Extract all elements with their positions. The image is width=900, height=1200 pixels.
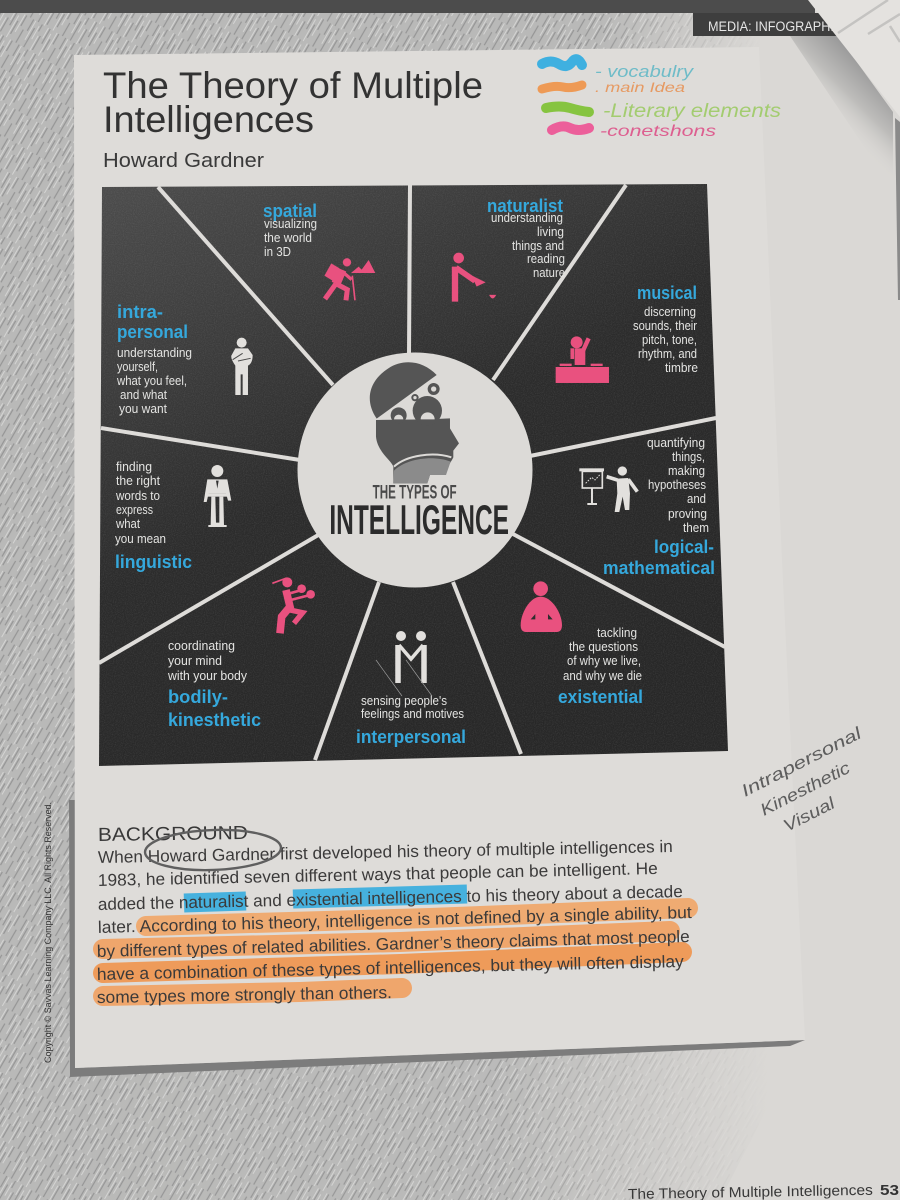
segment: musical: timbre [665, 360, 698, 375]
segment: spatial: spatial [263, 200, 317, 221]
section tab: media infographic [693, 13, 843, 36]
segment: musical [556, 282, 698, 383]
text block: background paragraph: by different types of related abilities. Gardner’s theory claims that most people [97, 927, 690, 961]
background: textured top band [0, 12, 762, 56]
segment: logical-mathematical: things, [672, 449, 705, 464]
text block: background paragraph: have a combination of these types of intelligences, but they will often display [97, 952, 684, 984]
icon: DJ at console [556, 336, 609, 383]
segment: existential: and why we die [563, 668, 642, 683]
heading: background: BACKGROUND [98, 823, 248, 846]
legend: vocabulary [542, 59, 695, 81]
segment: existential: the questions [569, 639, 638, 654]
segment: linguistic: the right [116, 473, 160, 488]
copyright line: Copyright © Savvas Learning Company LLC. All Rights Reserved. [43, 802, 54, 1063]
text block: background paragraph: added the naturalist and existential intelligences to his theory about a decade [98, 882, 683, 914]
title: The Theory of Multiple [103, 65, 483, 106]
icon: two people shaking hands [376, 631, 432, 696]
segment: interpersonal [356, 631, 466, 747]
segment: logical-mathematical: them [683, 520, 709, 535]
segment: naturalist [453, 195, 565, 302]
segment: linguistic: finding [116, 459, 152, 474]
segment: intra-personal: personal [117, 321, 188, 342]
segment: musical: discerning [644, 304, 696, 319]
segment: linguistic: express [116, 502, 153, 517]
segment: bodily-kinesthetic: kinesthetic [168, 709, 261, 730]
segment: musical: sounds, their [633, 318, 698, 333]
icon: meditating person [521, 581, 562, 632]
segment: bodily-kinesthetic: with your body [167, 668, 247, 683]
segment: intra-personal: yourself, [117, 359, 158, 374]
top dark strip [0, 0, 815, 13]
segment: linguistic: words to [115, 488, 160, 503]
dark sliver at right edge [895, 118, 900, 300]
legend: vocabulary: - vocabulry [595, 62, 695, 81]
segment: spatial: in 3D [264, 244, 291, 259]
segment: existential: tackling [597, 625, 637, 640]
segment: intra-personal: you want [119, 401, 167, 416]
legend: main idea [542, 79, 685, 95]
segment: spatial: visualizing [264, 216, 317, 231]
legend: main idea: . main Idea [595, 79, 685, 95]
segment: linguistic: linguistic [115, 551, 192, 572]
chart: types of intelligence wheel [90, 180, 735, 770]
center heading [329, 482, 509, 543]
highlights: vocabulary in blue [184, 894, 467, 903]
segment: musical: pitch, tone, [642, 332, 697, 347]
segment: naturalist: naturalist [487, 195, 563, 216]
segment: spatial: the world [264, 230, 312, 245]
handwritten note: Visual [780, 793, 839, 836]
panel: printed page [74, 47, 805, 1068]
background: textured bottom band [0, 1036, 810, 1200]
segment: naturalist: things and [512, 238, 564, 253]
text block: background paragraph: some types more strongly than others. [97, 983, 392, 1007]
segment: existential: existential [558, 686, 643, 707]
handwritten note [738, 723, 866, 836]
icon: speaker at lectern [204, 465, 231, 527]
icon: person watering plant [453, 253, 496, 302]
segment: intra-personal: understanding [117, 345, 192, 360]
icon: boxer [272, 577, 315, 633]
text block: background paragraph: later. According to his theory, intelligence is not defined by a single ability, but [98, 903, 692, 937]
handwritten highlighter legend [542, 59, 782, 140]
legend: connections [552, 123, 716, 140]
segment: linguistic [115, 459, 231, 572]
text block: background paragraph: 1983, he identified seven different ways that people can be intelligent. He [98, 859, 658, 890]
segment: linguistic: what [115, 516, 140, 531]
segment: logical-mathematical: mathematical [603, 557, 715, 578]
wheel background [90, 180, 735, 770]
segment: logical-mathematical [579, 435, 715, 578]
background: textured left band [0, 12, 75, 1082]
icon: hiker [325, 258, 375, 300]
center heading: INTELLIGENCE [329, 496, 509, 543]
segment: naturalist: understanding [491, 210, 563, 225]
segment: interpersonal: interpersonal [356, 726, 466, 747]
center heading: THE TYPES OF [373, 482, 457, 503]
segment: existential [521, 581, 643, 707]
text block: background paragraph [97, 837, 692, 1007]
segment: spatial [263, 200, 375, 300]
icon: thinking person [231, 338, 253, 395]
handwritten note: Kinesthetic [757, 758, 854, 820]
segment: existential: of why we live, [567, 653, 641, 668]
segment: bodily-kinesthetic: bodily- [168, 686, 228, 707]
text block: background paragraph: When Howard Gardner first developed his theory of multiple intelligences in [98, 837, 673, 867]
segment: musical: musical [637, 282, 697, 303]
segment: musical: rhythm, and [638, 346, 697, 361]
title [103, 65, 483, 140]
segment: bodily-kinesthetic: coordinating [168, 638, 235, 653]
wheel spokes [99, 185, 725, 760]
segment: naturalist: living [537, 224, 564, 239]
segment: logical-mathematical: proving [668, 506, 707, 521]
icon: head with gears [370, 362, 459, 483]
legend: connections: -conetshons [600, 123, 716, 140]
segment: logical-mathematical: hypotheses [648, 477, 706, 492]
segment: interpersonal: sensing people's [361, 693, 447, 708]
shadow of the paper corner [790, 36, 893, 190]
section tab: media infographic: MEDIA: INFOGRAPHIC [708, 19, 843, 34]
segment: naturalist: nature [533, 265, 565, 280]
center circle [298, 352, 532, 588]
segment: logical-mathematical: making [668, 463, 705, 478]
legend: literary elements: -Literary elements [603, 101, 782, 122]
sheet shadow under page panel [69, 800, 805, 1077]
segment: intra-personal [116, 301, 253, 416]
page footer: 53 [880, 1182, 899, 1199]
icon: presenter with chart [579, 466, 637, 512]
title: Intelligences [103, 99, 314, 140]
segment: logical-mathematical: logical- [654, 536, 714, 557]
segment: logical-mathematical: quantifying [647, 435, 705, 450]
segment: bodily-kinesthetic: your mind [168, 653, 222, 668]
highlights: main idea in orange [103, 908, 688, 996]
author: Howard Gardner [103, 150, 264, 172]
segment: bodily-kinesthetic [167, 577, 315, 730]
paper corner overlapping the page [808, 0, 900, 117]
segment: intra-personal: what you feel, [116, 373, 187, 388]
segment: interpersonal: feelings and motives [361, 706, 464, 721]
segment: naturalist: reading [527, 251, 565, 266]
segment: intra-personal: intra- [117, 301, 163, 322]
pen circle around Howard Gardner [144, 828, 282, 872]
handwritten note: Intrapersonal [738, 723, 866, 801]
legend: literary elements [546, 101, 782, 122]
segment: logical-mathematical: and [687, 491, 706, 506]
segment: linguistic: you mean [115, 531, 166, 546]
segment: intra-personal: and what [120, 387, 167, 402]
